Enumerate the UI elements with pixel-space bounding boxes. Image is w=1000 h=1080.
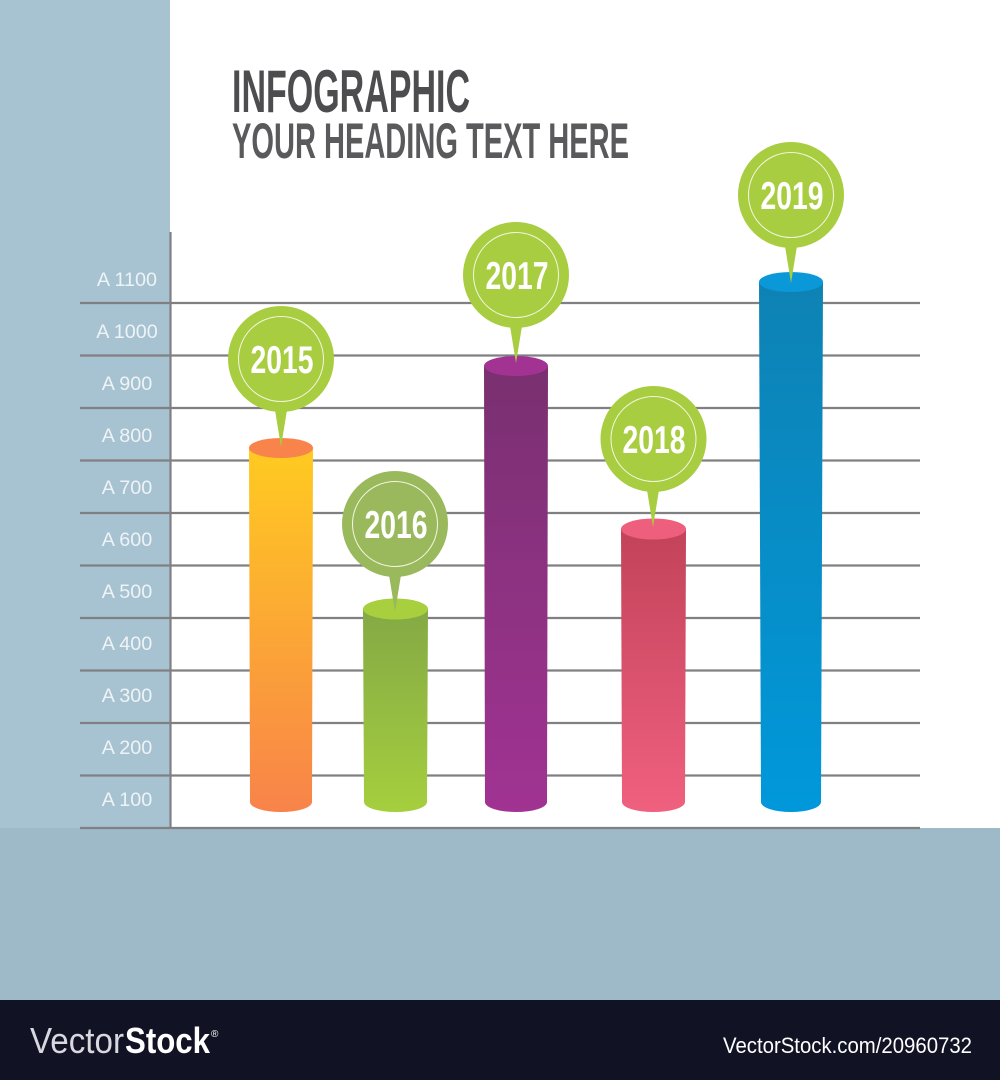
subheading: YOUR HEADING TEXT HERE [232,113,629,169]
pin: 2015: 2015 [250,339,314,382]
y axis labels: A 400 [102,633,152,655]
heading: infographic: INFOGRAPHIC [232,58,470,125]
y axis labels: A 300 [102,685,152,707]
y axis labels: A 600 [102,529,152,551]
footer logo [30,1020,219,1061]
pin: 2015 [228,306,334,447]
pin: 2016: 2016 [364,504,428,547]
footer logo: Vector [30,1020,124,1061]
y axis labels: A 1100 [97,269,157,291]
bar: 2015 [249,438,313,812]
bar chart [80,142,920,828]
pin: 2019 [738,142,844,283]
pin: 2018: 2018 [622,419,686,462]
y axis labels: A 1000 [96,321,158,343]
background: bottom band [0,828,1000,1000]
bar: 2019 [759,272,823,812]
bar: 2016 [363,598,428,812]
bar: 2018 [621,518,686,812]
background: left panel [0,0,170,828]
footer image id: VectorStock.com/20960732 [723,1033,972,1058]
title [232,58,629,169]
bar: 2017 [484,356,548,812]
footer logo: Stock [125,1020,211,1061]
y axis labels: A 800 [102,425,152,447]
pin: 2017 [463,222,569,363]
footer logo: ® [211,1029,219,1040]
y axis labels: A 200 [102,737,152,759]
y axis labels: A 700 [102,477,152,499]
pin: 2017: 2017 [486,255,548,298]
footer bar [0,1000,1000,1080]
pin: 2018 [600,386,706,527]
y axis labels [96,269,158,811]
pin: 2019: 2019 [760,175,824,218]
y axis labels: A 900 [102,373,152,395]
chart grid and axes [80,232,920,828]
y axis labels: A 100 [102,789,152,811]
pin: 2016 [342,471,448,612]
y axis labels: A 500 [102,581,152,603]
